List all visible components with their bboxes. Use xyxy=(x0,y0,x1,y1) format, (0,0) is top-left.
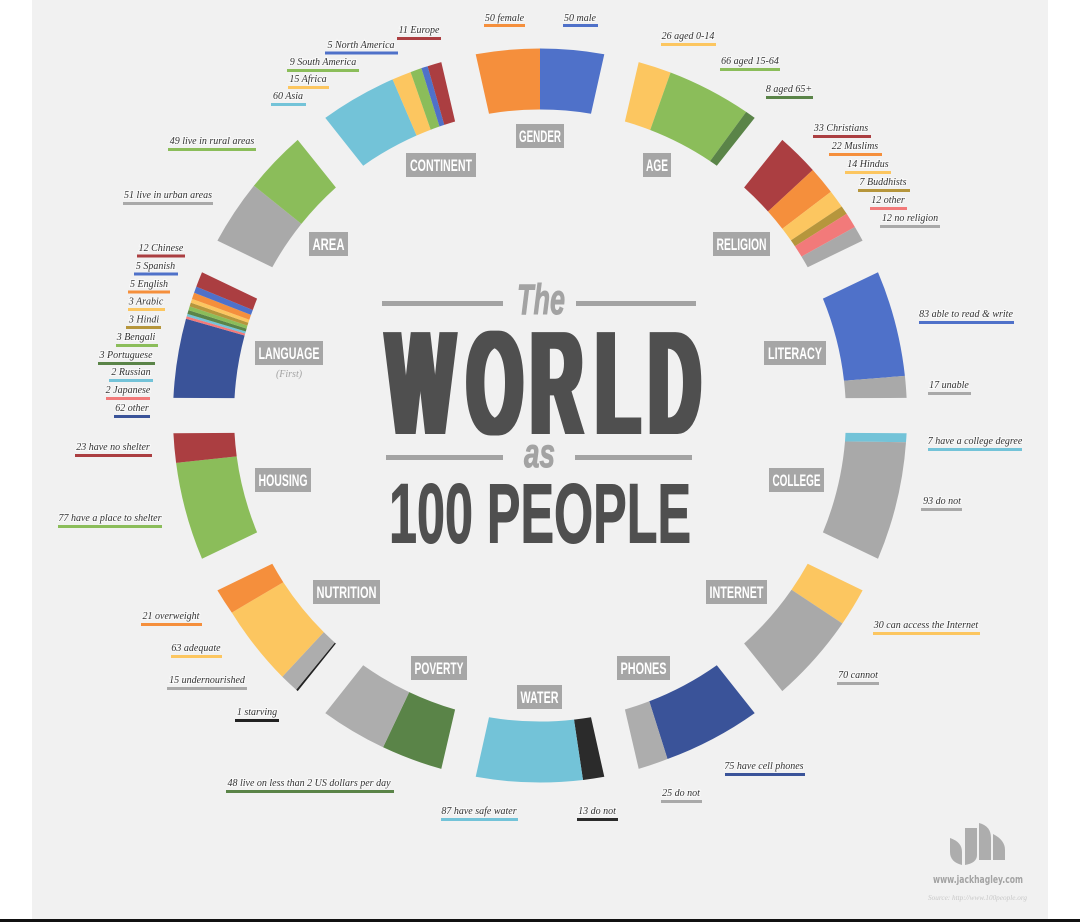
label: 62 other: 62 other xyxy=(115,403,149,414)
label: 8 aged 65+: 8 aged 65+ xyxy=(766,84,812,95)
label: 11 Europe: 11 Europe xyxy=(399,25,440,36)
label: 13 do not: 13 do not xyxy=(578,806,616,817)
segment: 33 Christians xyxy=(744,140,813,212)
label: 30 can access the Internet: 30 can access the Internet xyxy=(873,620,978,631)
label: 3 Hindi xyxy=(126,314,161,329)
credit: website: www.jackhagley.com xyxy=(933,873,1023,886)
segment: 12 no religion xyxy=(802,227,863,267)
label: 70 cannot xyxy=(837,670,879,685)
segment: 23 have no shelter xyxy=(173,433,237,463)
label: 62 other xyxy=(114,403,150,418)
label: 5 English: 5 English xyxy=(130,279,168,290)
label: 15 undernourished: 15 undernourished xyxy=(169,675,246,686)
panel: gender xyxy=(476,13,604,148)
segment: 3 Hindi xyxy=(190,303,248,326)
label: 12 Chinese: 12 Chinese xyxy=(139,243,184,254)
label: 17 unable xyxy=(928,380,971,395)
tag: internet: INTERNET xyxy=(710,583,764,602)
tag: area: AREA xyxy=(312,235,344,254)
label: 63 adequate: 63 adequate xyxy=(171,643,221,654)
label: 22 Muslims xyxy=(829,141,882,156)
label: 66 aged 15-64: 66 aged 15-64 xyxy=(721,56,779,67)
panel: continent xyxy=(271,25,476,177)
label: 22 Muslims: 22 Muslims xyxy=(832,141,878,152)
label: 70 cannot: 70 cannot xyxy=(838,670,878,681)
label: 60 Asia: 60 Asia xyxy=(273,91,303,102)
label: 51 live in urban areas: 51 live in urban areas xyxy=(124,190,212,201)
label: 9 South America: 9 South America xyxy=(290,57,356,68)
label: 5 English xyxy=(128,279,170,294)
segment: 2 Japanese xyxy=(186,316,245,336)
tag: literacy: LITERACY xyxy=(768,344,822,363)
label: 12 no religion xyxy=(880,213,940,228)
segment: remaining 52 xyxy=(325,665,409,747)
label: 49 live in rural areas: 49 live in rural areas xyxy=(170,136,254,147)
label: 21 overweight: 21 overweight xyxy=(143,611,200,622)
tag: continent: CONTINENT xyxy=(410,156,472,175)
segment: 12 other xyxy=(795,214,855,257)
tag: poverty: POVERTY xyxy=(414,659,464,678)
segment: 11 Europe xyxy=(428,62,455,125)
label: 12 other xyxy=(870,195,907,210)
tag: poverty xyxy=(411,656,467,680)
segment: 50 female xyxy=(476,48,540,114)
label: 5 North America: 5 North America xyxy=(327,40,395,51)
label: 3 Hindi: 3 Hindi xyxy=(128,314,159,326)
panel: area xyxy=(123,136,348,267)
tag: religion: RELIGION xyxy=(716,235,766,254)
segment: 66 aged 15-64 xyxy=(650,72,746,161)
label: 60 Asia xyxy=(271,91,306,106)
segment: 2 Russian xyxy=(187,314,246,334)
label: 26 aged 0-14: 26 aged 0-14 xyxy=(662,31,714,42)
segment: 8 aged 65+ xyxy=(710,112,755,166)
segment: 30 can access the Internet xyxy=(792,564,863,624)
title xyxy=(382,276,700,560)
panel: phones xyxy=(617,656,805,803)
segment: 50 male xyxy=(540,48,604,114)
segment: 7 Buddhists xyxy=(791,206,847,246)
tag: water xyxy=(517,685,562,709)
label: 93 do not xyxy=(921,496,962,511)
label: 33 Christians: 33 Christians xyxy=(813,123,868,134)
segment: 75 have cell phones xyxy=(649,665,755,759)
tag: language xyxy=(255,341,323,365)
segment: 12 Chinese xyxy=(196,272,257,310)
segment: 93 do not xyxy=(823,442,906,559)
icon: jackhagley logo xyxy=(950,823,1005,865)
label: 5 North America xyxy=(325,40,398,54)
label: 25 do not xyxy=(661,788,702,803)
panel: poverty xyxy=(226,656,467,793)
segment: 3 Arabic xyxy=(191,299,249,323)
segment: 77 have a place to shelter xyxy=(176,456,257,559)
tag: college: COLLEGE xyxy=(772,471,820,490)
segment: 15 Africa xyxy=(393,72,431,136)
segment: 62 other xyxy=(173,319,245,398)
label: 50 male: 50 male xyxy=(564,13,597,24)
segment: 48 live on less than 2 US dollars per day xyxy=(383,692,455,769)
label: 33 Christians xyxy=(813,123,871,138)
label: 3 Bengali: 3 Bengali xyxy=(116,332,156,343)
segment: 15 undernourished xyxy=(282,632,335,690)
segment: 1 starving xyxy=(296,643,336,691)
tag: nutrition xyxy=(313,580,380,604)
note: first language: (First) xyxy=(276,369,303,380)
panel: internet xyxy=(706,564,980,691)
label: 15 Africa: 15 Africa xyxy=(289,74,327,85)
segment: 49 live in rural areas xyxy=(254,140,336,224)
panel: water xyxy=(441,685,618,821)
segment: 83 able to read and write xyxy=(823,272,905,381)
label: 2 Russian: 2 Russian xyxy=(111,367,151,378)
segment: 51 live in urban areas xyxy=(217,186,301,267)
tag: phones: PHONES xyxy=(620,659,666,678)
label: 3 Portuguese xyxy=(98,350,155,365)
segment: 9 South America xyxy=(411,68,440,130)
label: 14 Hindus xyxy=(845,159,891,174)
label: 87 have safe water: 87 have safe water xyxy=(441,806,517,817)
segment: 7 have a college degree xyxy=(845,433,907,442)
label: 17 unable: 17 unable xyxy=(929,380,969,391)
label: 3 Bengali xyxy=(116,332,158,347)
segment: 60 Asia xyxy=(325,79,417,166)
label: 75 have cell phones: 75 have cell phones xyxy=(724,761,804,772)
label: 23 have no shelter: 23 have no shelter xyxy=(76,442,150,453)
label: 14 Hindus: 14 Hindus xyxy=(847,159,889,170)
label: 25 do not: 25 do not xyxy=(662,788,700,799)
segment: 3 Bengali xyxy=(188,306,247,329)
segment: 5 Spanish xyxy=(194,287,253,315)
tag: housing xyxy=(255,468,311,492)
tag: continent xyxy=(406,153,476,177)
panel: housing xyxy=(58,433,311,559)
tag: age xyxy=(643,153,671,177)
label: 7 Buddhists xyxy=(858,177,910,192)
segment: 21 overweight xyxy=(217,564,283,613)
label: 2 Russian xyxy=(109,367,153,382)
tag: religion xyxy=(713,232,770,256)
segment: 5 English xyxy=(192,293,251,320)
panel: nutrition xyxy=(141,564,380,722)
tag: area xyxy=(309,232,348,256)
label: 21 overweight xyxy=(141,611,202,626)
segment: 70 cannot xyxy=(744,590,842,691)
tag: literacy xyxy=(764,341,826,365)
panel: religion xyxy=(713,123,940,267)
label: 3 Portuguese: 3 Portuguese xyxy=(98,350,153,361)
segment: 5 North America xyxy=(421,66,444,126)
segment: 87 have safe water xyxy=(476,717,583,783)
label: 11 Europe xyxy=(397,25,441,40)
title: WORLD xyxy=(387,300,700,466)
label: 15 undernourished xyxy=(167,675,247,690)
tag: water: WATER xyxy=(520,688,558,707)
label: 5 Spanish xyxy=(134,261,178,276)
label: 15 Africa xyxy=(288,74,329,89)
segment: 26 aged 0-14 xyxy=(625,62,671,130)
segment: 17 unable xyxy=(844,376,907,398)
tag: college xyxy=(769,468,824,492)
label: 12 no religion: 12 no religion xyxy=(882,213,938,224)
tag: phones xyxy=(617,656,670,680)
segment: 22 Muslims xyxy=(768,170,831,229)
title: The xyxy=(517,276,565,324)
tag: internet xyxy=(706,580,767,604)
label: 9 South America xyxy=(287,57,359,72)
label: 1 starving: 1 starving xyxy=(237,707,277,718)
panel: age xyxy=(625,31,813,177)
label: 50 female: 50 female xyxy=(485,13,525,24)
segment: 3 Portuguese xyxy=(187,310,247,332)
label: 2 Japanese: 2 Japanese xyxy=(106,385,151,396)
segment: 25 do not xyxy=(625,701,668,769)
label: 83 able to read and write: 83 able to read & write xyxy=(919,309,1013,320)
label: 77 have a place to shelter: 77 have a place to shelter xyxy=(58,513,162,524)
title: as xyxy=(524,430,555,476)
label: 7 Buddhists: 7 Buddhists xyxy=(860,177,907,188)
tag: gender: GENDER xyxy=(519,127,561,146)
label: 13 do not xyxy=(577,806,618,821)
panel: college xyxy=(769,433,1023,559)
credit: source: Source: http://www.100people.org xyxy=(928,893,1027,902)
label: 7 have a college degree: 7 have a college degree xyxy=(928,436,1023,447)
segment: 14 Hindus xyxy=(782,192,842,240)
segment: 13 do not xyxy=(574,717,604,780)
tag: age: AGE xyxy=(646,156,668,175)
label: 93 do not: 93 do not xyxy=(923,496,961,507)
label: 5 Spanish: 5 Spanish xyxy=(136,261,175,272)
tag: nutrition: NUTRITION xyxy=(316,583,376,602)
segment: 63 adequate xyxy=(232,582,324,677)
panel: language xyxy=(98,243,323,418)
title: 100 PEOPLE xyxy=(389,466,691,560)
panel: literacy xyxy=(764,272,1014,398)
label: 3 Arabic: 3 Arabic xyxy=(128,296,164,308)
label: 1 starving xyxy=(235,707,279,722)
label: 12 other: 12 other xyxy=(871,195,905,206)
tag: language: LANGUAGE xyxy=(258,344,320,363)
tag: housing: HOUSING xyxy=(258,471,308,490)
label: 48 live on less than 2 US dollars per day: 48 live on less than 2 US dollars per day xyxy=(227,778,391,789)
